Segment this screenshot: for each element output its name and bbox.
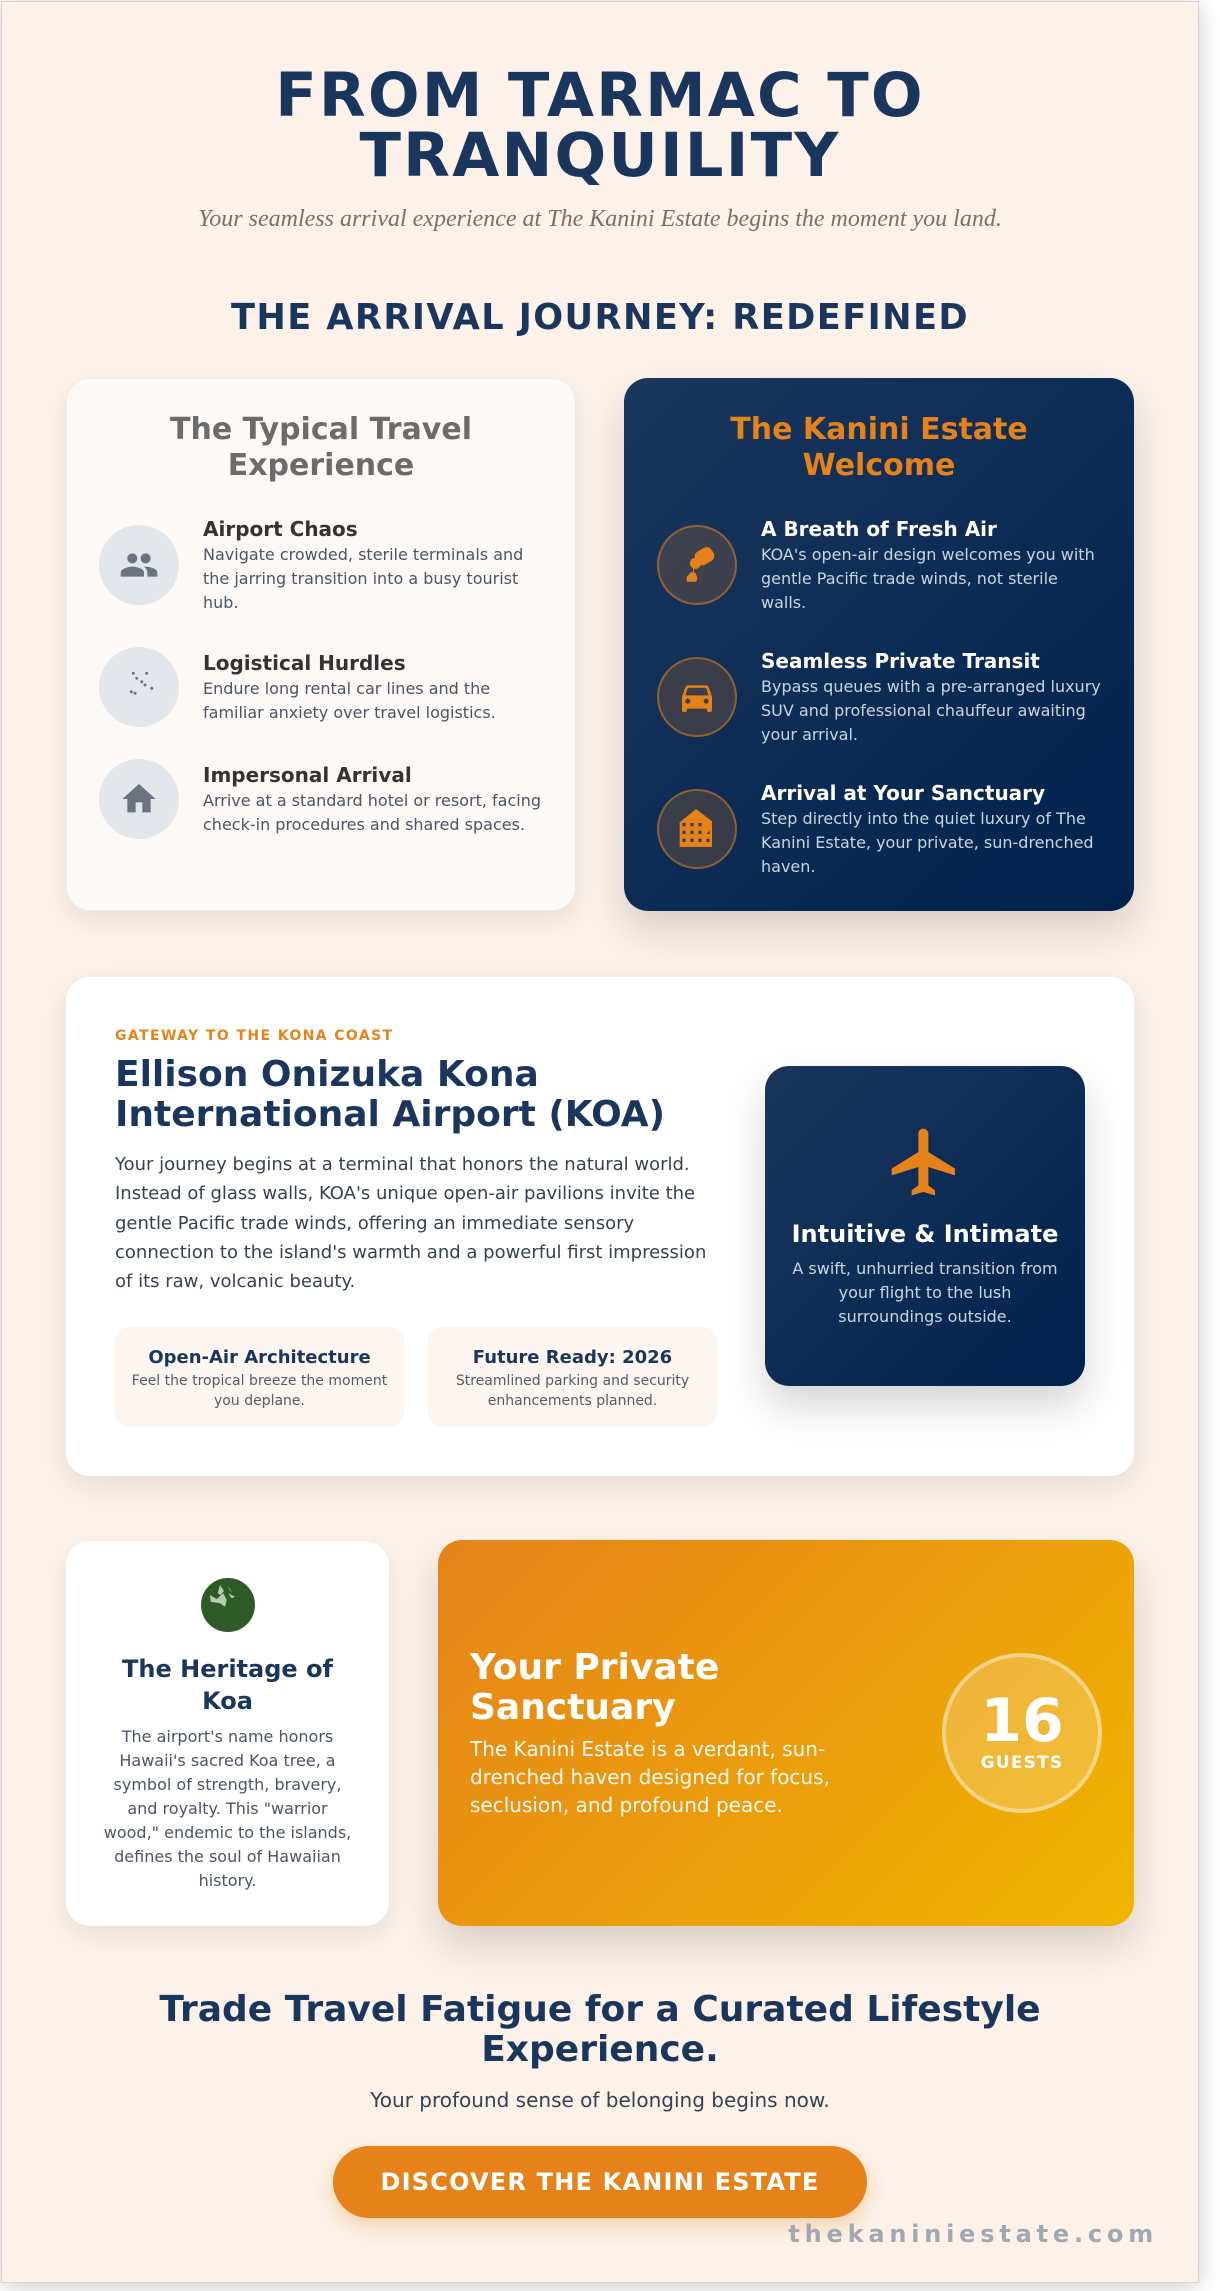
item: airport chaos: hub.	[203, 593, 239, 612]
heritage text: wood," endemic to the islands,	[104, 1823, 351, 1842]
item: fresh air: A Breath of Fresh Air	[761, 517, 997, 541]
item: logistical hurdles: familiar anxiety over travel logistics.	[203, 703, 496, 722]
button: discover the kanini estate	[333, 2146, 867, 2218]
item: airport chaos: the jarring transition into a busy tourist	[203, 569, 518, 588]
icon: estate building	[657, 789, 737, 869]
sanctuary text	[470, 1737, 830, 1817]
stat badge: 16 guests	[942, 1653, 1102, 1813]
panel: heritage of koa	[66, 1541, 389, 1926]
callout text: A swift, unhurried transition from	[792, 1259, 1058, 1278]
feature text	[456, 1373, 689, 1409]
panel: typical travel experience	[66, 378, 576, 911]
item: fresh air	[761, 517, 1095, 612]
closing heading: Trade Travel Fatigue for a Curated Lifestyle	[159, 1989, 1041, 2030]
sanctuary heading: Sanctuary	[470, 1687, 676, 1728]
stat label: GUESTS	[981, 1753, 1063, 1773]
icon: car	[657, 657, 737, 737]
item: arrival at sanctuary: Step directly into the quiet luxury of The	[761, 809, 1086, 828]
icon: breeze	[657, 525, 737, 605]
callout text: your flight to the lush	[839, 1283, 1011, 1302]
panel: Ellison Onizuka Kona International Airport	[66, 977, 1134, 1476]
heritage text: history.	[199, 1871, 256, 1890]
airport heading: Ellison Onizuka Kona	[115, 1054, 539, 1095]
heritage text	[104, 1727, 351, 1890]
icon: koa leaf	[201, 1578, 255, 1632]
eyebrow: GATEWAY TO THE KONA COAST	[115, 1028, 394, 1044]
airport heading: International Airport (KOA)	[115, 1094, 665, 1135]
panel heading: Experience	[228, 448, 414, 482]
panel heading	[730, 412, 1028, 482]
feature title: Open-Air Architecture	[148, 1347, 371, 1368]
closing heading: Experience.	[481, 2029, 719, 2070]
airport heading	[115, 1054, 665, 1135]
closing subtext: Your profound sense of belonging begins now.	[370, 2088, 830, 2112]
item: fresh air: KOA's open-air design welcomes you with	[761, 545, 1095, 564]
callout: intuitive and intimate	[765, 1066, 1085, 1386]
panel heading: Welcome	[803, 448, 955, 482]
airport description	[115, 1154, 706, 1292]
item: impersonal arrival: Impersonal Arrival	[203, 763, 412, 787]
heritage heading	[122, 1655, 334, 1715]
feature text: Feel the tropical breeze the moment	[132, 1373, 387, 1389]
item: airport chaos: Navigate crowded, sterile terminals and	[203, 545, 523, 564]
icon: plane	[892, 1128, 955, 1196]
item: fresh air: gentle Pacific trade winds, not sterile	[761, 569, 1058, 588]
feature title: Future Ready: 2026	[473, 1347, 672, 1368]
airport description: gentle Pacific trade winds, offering an immediate sensory	[115, 1213, 634, 1234]
icon: crowd	[99, 525, 179, 605]
closing heading	[159, 1989, 1041, 2070]
airport description: connection to the island's warmth and a powerful first impression	[115, 1242, 706, 1263]
item: impersonal arrival	[203, 763, 541, 834]
item: private transit	[761, 649, 1101, 744]
item: airport chaos: Airport Chaos	[203, 517, 358, 541]
button: discover the kanini estate: DISCOVER THE KANINI ESTATE	[381, 2168, 819, 2196]
feature text: you deplane.	[214, 1393, 305, 1409]
sanctuary text: drenched haven designed for focus,	[470, 1765, 830, 1789]
item: logistical hurdles: Endure long rental car lines and the	[203, 679, 490, 698]
sanctuary heading: Your Private	[470, 1647, 719, 1688]
item: impersonal arrival: Arrive at a standard hotel or resort, facing	[203, 791, 541, 810]
item: arrival at sanctuary: haven.	[761, 857, 815, 876]
airport description: Instead of glass walls, KOA's unique open-air pavilions invite the	[115, 1183, 695, 1204]
item: arrival at sanctuary	[761, 781, 1094, 876]
heritage text: defines the soul of Hawaiian	[114, 1847, 341, 1866]
item: arrival at sanctuary: Kanini Estate, your private, sun-drenched	[761, 833, 1094, 852]
panel: your private sanctuary	[438, 1540, 1134, 1926]
sanctuary heading	[470, 1647, 719, 1728]
website url: thekaniniestate.com	[788, 2220, 1158, 2248]
feature card: open-air architecture	[115, 1327, 404, 1427]
feature text	[132, 1373, 387, 1409]
item: logistical hurdles	[203, 651, 496, 722]
icon: house	[99, 759, 179, 839]
title	[275, 61, 925, 191]
callout text	[792, 1259, 1058, 1326]
feature text: Streamlined parking and security	[456, 1373, 689, 1389]
airport description: of its raw, volcanic beauty.	[115, 1271, 355, 1292]
heritage text: and royalty. This "warrior	[127, 1799, 328, 1818]
panel heading: The Kanini Estate	[730, 412, 1028, 446]
feature card: future ready	[428, 1327, 717, 1427]
item: private transit: your arrival.	[761, 725, 858, 744]
airport description: Your journey begins at a terminal that honors the natural world.	[115, 1154, 690, 1175]
item: private transit: Seamless Private Transit	[761, 649, 1040, 673]
item: arrival at sanctuary: Arrival at Your Sanctuary	[761, 781, 1045, 805]
title: FROM TARMAC TO	[275, 61, 925, 131]
item: logistical hurdles: Logistical Hurdles	[203, 651, 406, 675]
heritage text: Hawaii's sacred Koa tree, a	[119, 1751, 336, 1770]
panel heading: The Typical Travel	[170, 412, 472, 446]
item: impersonal arrival: check-in procedures and shared spaces.	[203, 815, 525, 834]
heading: the arrival journey: THE ARRIVAL JOURNEY: REDEFINED	[231, 297, 969, 338]
subtitle: Your seamless arrival experience at The Kanini Estate begins the moment you land.	[198, 206, 1002, 232]
heritage text: symbol of strength, bravery,	[114, 1775, 341, 1794]
item: airport chaos	[203, 517, 523, 612]
icon: scattered dots	[99, 647, 179, 727]
item: private transit: SUV and professional chauffeur awaiting	[761, 701, 1086, 720]
panel: kanini estate welcome	[624, 378, 1134, 911]
callout text: surroundings outside.	[838, 1307, 1012, 1326]
stat number: 16	[980, 1686, 1064, 1756]
callout title: Intuitive & Intimate	[792, 1220, 1058, 1248]
heritage text: The airport's name honors	[122, 1727, 333, 1746]
item: private transit: Bypass queues with a pre-arranged luxury	[761, 677, 1101, 696]
item: fresh air: walls.	[761, 593, 806, 612]
heritage heading: Koa	[202, 1687, 253, 1715]
sanctuary text: seclusion, and profound peace.	[470, 1793, 783, 1817]
title: TRANQUILITY	[360, 121, 840, 191]
sanctuary text: The Kanini Estate is a verdant, sun-	[470, 1737, 825, 1761]
feature text: enhancements planned.	[488, 1393, 657, 1409]
heritage heading: The Heritage of	[122, 1655, 333, 1683]
panel heading	[170, 412, 472, 482]
